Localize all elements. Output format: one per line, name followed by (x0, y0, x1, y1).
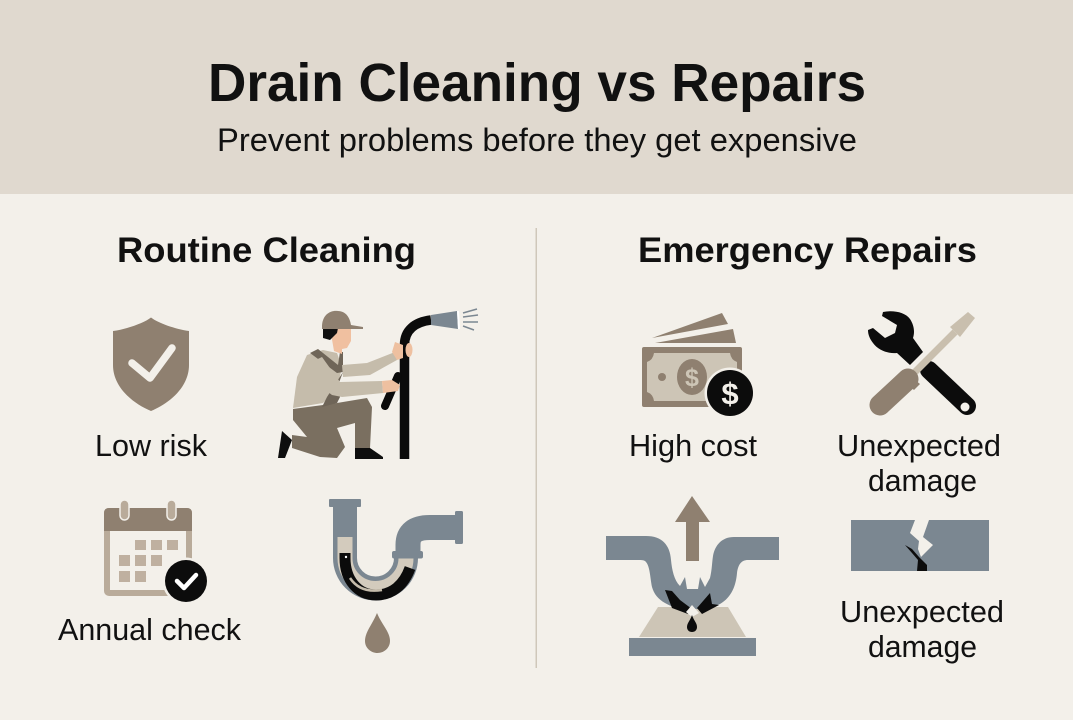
header band (0, 0, 1073, 194)
illustration: worker with hose (278, 309, 478, 459)
illustration: burst pipe with arrow (606, 496, 779, 656)
icon: calendar with check badge (104, 500, 210, 604)
label: unexpected damage (bottom): damage (868, 630, 977, 664)
panel: routine cleaning (58, 231, 478, 653)
title: Drain Cleaning vs Repairs (208, 53, 866, 113)
label: unexpected damage (bottom): Unexpected (840, 595, 1004, 629)
panel: emergency repairs (606, 231, 1004, 664)
illustration: cracked slab (851, 520, 989, 571)
label: annual check: Annual check (58, 613, 242, 647)
label: unexpected damage (top) (837, 429, 1001, 498)
label: unexpected damage (top): damage (868, 464, 977, 498)
illustration: clogged trap pipe with drip (329, 499, 463, 653)
subtitle: Prevent problems before they get expensive (217, 122, 857, 158)
heading: routine cleaning: Routine Cleaning (117, 231, 416, 270)
icon: cash with dollar coin: $ (721, 376, 739, 411)
label: low risk: Low risk (95, 429, 208, 463)
heading: emergency repairs: Emergency Repairs (638, 231, 977, 270)
label: unexpected damage (top): Unexpected (837, 429, 1001, 463)
icon: cash with dollar coin (642, 313, 756, 418)
label: high cost: High cost (629, 429, 758, 463)
label: unexpected damage (bottom) (840, 595, 1004, 664)
icon: shield with check (113, 318, 189, 411)
icon: wrench and screwdriver (868, 311, 975, 412)
icon: cash with dollar coin: $ (685, 364, 699, 392)
